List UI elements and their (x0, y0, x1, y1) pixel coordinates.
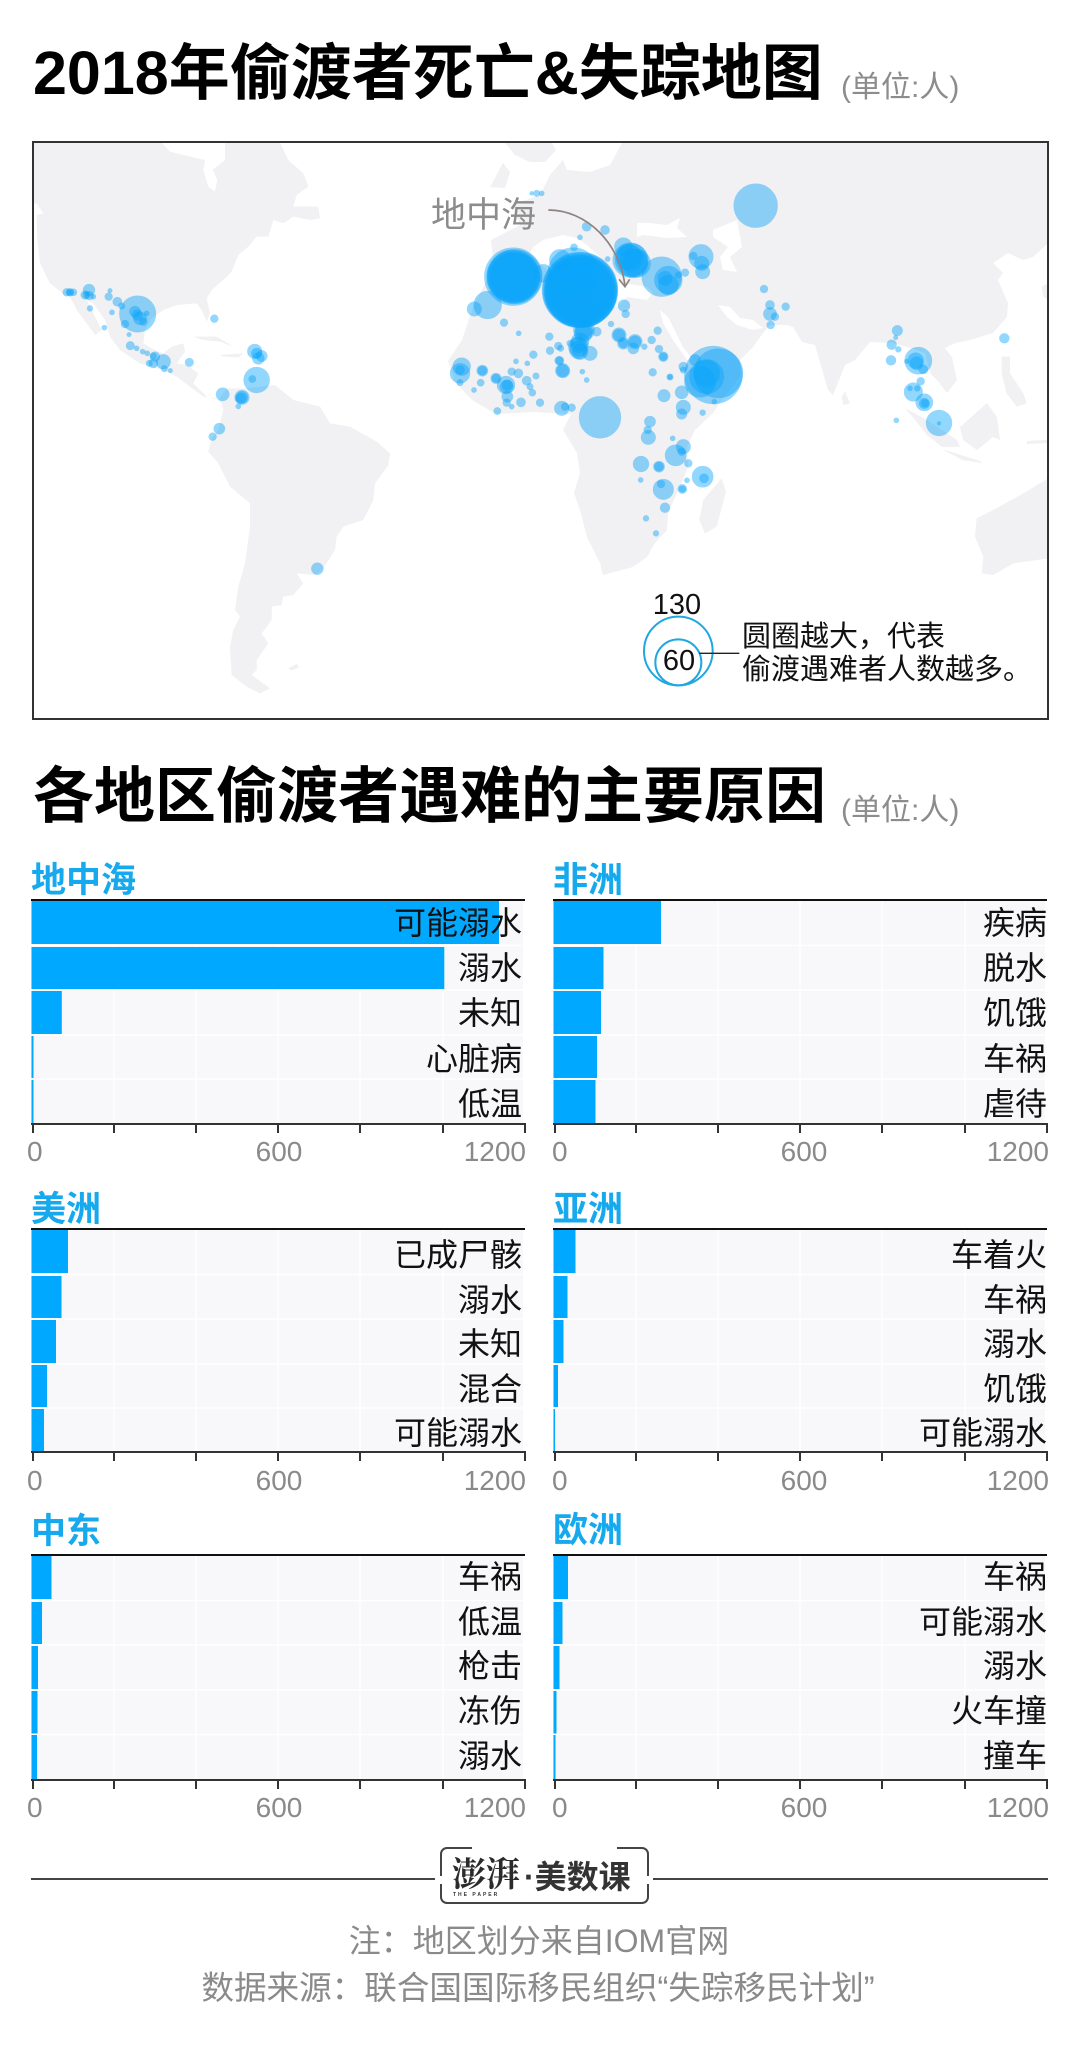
chart: Africa: 脱水 (983, 950, 1047, 986)
chart: Europe: 1200 (987, 1792, 1049, 1823)
chart: Middle East: 冻伤 (458, 1693, 522, 1729)
chart: Middle East: 1200 (464, 1792, 526, 1823)
water: Mediterranean (530, 235, 653, 307)
chart: Mediterranean: 未知 (458, 995, 522, 1031)
chart: Europe: 600 (781, 1792, 827, 1823)
legend caption: 圆圈越大，代表 (742, 620, 945, 653)
chart: Europe: 0 (552, 1792, 568, 1823)
chart heading: 美洲 (31, 1190, 101, 1229)
chart: Middle East: 车祸 (458, 1559, 522, 1595)
chart: Africa: 虐待 (983, 1086, 1047, 1122)
chart: Americas: 1200 (464, 1465, 526, 1496)
logo: The Paper 美数课: ·美数课 (524, 1859, 631, 1895)
chart: Africa: 饥饿 (983, 995, 1047, 1031)
chart: Middle East (27, 1512, 526, 1823)
chart: Americas: 可能溺水 (394, 1415, 522, 1451)
chart heading: 非洲 (553, 861, 623, 900)
chart: Mediterranean: 600 (256, 1136, 302, 1167)
chart: Middle East: 600 (256, 1792, 302, 1823)
land: Eurasia and Africa (448, 143, 1048, 575)
chart: Asia (552, 1190, 1049, 1496)
chart: Middle East: 低温 (458, 1604, 522, 1640)
unit note: causes: (单位:人) (841, 794, 959, 827)
chart: Mediterranean (27, 861, 526, 1167)
footnote: region note: 注：地区划分来自IOM官网 (349, 1923, 729, 1959)
land: Sri Lanka and Asian islands (842, 283, 1048, 407)
chart: Americas (27, 1190, 526, 1496)
logo: The Paper 美数课: THE PAPER (453, 1892, 499, 1898)
chart: Africa: 600 (781, 1136, 827, 1167)
land masses (34, 143, 1048, 693)
bubbles: Asia (887, 326, 1009, 435)
map frame (33, 142, 1048, 719)
chart: Mediterranean: 溺水 (458, 950, 522, 986)
bubbles: Europe, Mediterranean, Middle East, Africa (451, 184, 789, 444)
land: Scandinavia (505, 143, 556, 162)
chart: Mediterranean: 1200 (464, 1136, 526, 1167)
chart: Africa: 0 (552, 1136, 568, 1167)
chart: Asia: 溺水 (983, 1326, 1047, 1362)
chart: Asia: 车着火 (951, 1237, 1047, 1273)
land: British Isles (490, 163, 510, 188)
chart: Europe (552, 1511, 1049, 1823)
chart: Europe: 车祸 (983, 1559, 1047, 1595)
title: causes: 各地区偷渡者遇难的主要原因 (33, 762, 826, 830)
water: Red Sea (660, 310, 693, 360)
chart: Africa: 1200 (987, 1136, 1049, 1167)
land: Madagascar (699, 478, 726, 533)
chart: Asia: 可能溺水 (919, 1415, 1047, 1451)
land: Americas (34, 143, 390, 693)
chart: Middle East: 0 (27, 1792, 43, 1823)
arrow: Mediterranean pointer (548, 210, 630, 287)
chart: Middle East: 溺水 (458, 1738, 522, 1774)
chart: Americas: 已成尸骸 (394, 1237, 522, 1273)
chart: Americas: 未知 (458, 1326, 522, 1362)
chart heading: 亚洲 (553, 1190, 623, 1229)
unit note: map: (单位:人) (841, 71, 959, 104)
footnote: data source: 数据来源：联合国国际移民组织“失踪移民计划” (201, 1969, 875, 2006)
chart: Africa (552, 861, 1049, 1167)
bubbles: Americas (63, 285, 323, 574)
chart heading: 地中海 (31, 861, 136, 900)
chart: Americas: 混合 (458, 1371, 522, 1407)
logo: The Paper 美数课 (31, 1848, 1048, 1903)
chart: Europe: 火车撞 (951, 1693, 1047, 1729)
chart: Asia: 600 (781, 1465, 827, 1496)
chart: Mediterranean: 可能溺水 (394, 905, 522, 941)
logo: The Paper 美数课: 澎湃 (452, 1856, 520, 1894)
land: Sumatra, Java, Borneo (905, 403, 1047, 463)
chart: Americas: 600 (256, 1465, 302, 1496)
chart: Mediterranean: 0 (27, 1136, 43, 1167)
legend caption: 偷渡遇难者人数越多。 (742, 653, 1032, 686)
chart: Mediterranean: 心脏病 (426, 1041, 522, 1077)
land: Australia (975, 478, 1048, 575)
chart: Africa: 车祸 (983, 1041, 1047, 1077)
chart: Asia: 车祸 (983, 1282, 1047, 1318)
legend value 130: 130 (653, 589, 701, 621)
bubbles: southern and eastern Africa (634, 440, 713, 536)
chart: Asia: 饥饿 (983, 1371, 1047, 1407)
chart: Africa: 疾病 (983, 905, 1047, 941)
chart: Asia: 1200 (987, 1465, 1049, 1496)
legend: bubble size (644, 617, 739, 685)
water: Persian Gulf (718, 305, 763, 330)
chart: Americas: 0 (27, 1465, 43, 1496)
chart heading: 中东 (31, 1512, 101, 1551)
chart: Asia: 0 (552, 1465, 568, 1496)
chart: Europe: 可能溺水 (919, 1604, 1047, 1640)
panel: world map (33, 142, 1048, 719)
chart: Americas: 溺水 (458, 1282, 522, 1318)
chart: Europe: 撞车 (983, 1738, 1047, 1774)
water: Black Sea (637, 218, 687, 238)
label: Mediterranean: 地中海 (431, 196, 536, 235)
chart: Middle East: 枪击 (458, 1648, 522, 1684)
legend value 60: 60 (663, 645, 695, 677)
water: Caspian Sea (713, 220, 742, 272)
chart: Mediterranean: 低温 (458, 1086, 522, 1122)
chart heading: 欧洲 (553, 1511, 623, 1550)
title: map: 2018年偷渡者死亡&失踪地图 (33, 39, 823, 107)
chart: Europe: 溺水 (983, 1648, 1047, 1684)
